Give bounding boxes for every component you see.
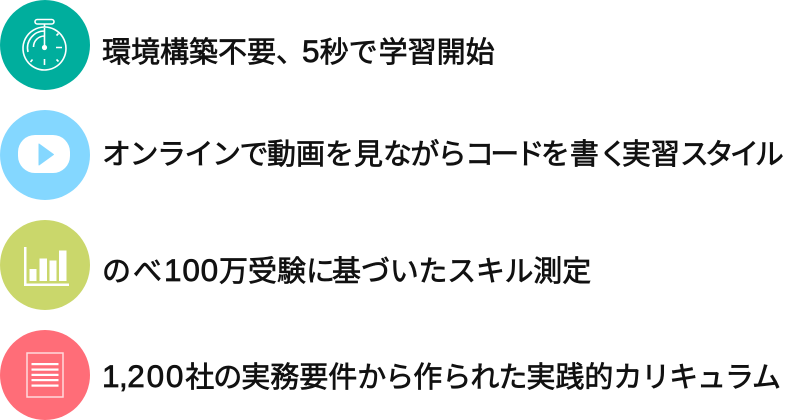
icon: stopwatch: [0, 0, 90, 90]
icon: video play: [0, 110, 90, 200]
text: row 3: のべ100万受験に基づいたスキル測定: [102, 252, 591, 288]
text: row 1: 環境構築不要、5秒で学習開始: [102, 33, 495, 69]
icon: bar chart: [0, 220, 90, 310]
text: row 2: オンラインで動画を見ながらコードを書く実習スタイル: [102, 139, 780, 171]
text: row 4: 1,200社の実務要件から作られた実践的カリキュラム: [102, 358, 780, 394]
icon: document: [0, 330, 90, 420]
